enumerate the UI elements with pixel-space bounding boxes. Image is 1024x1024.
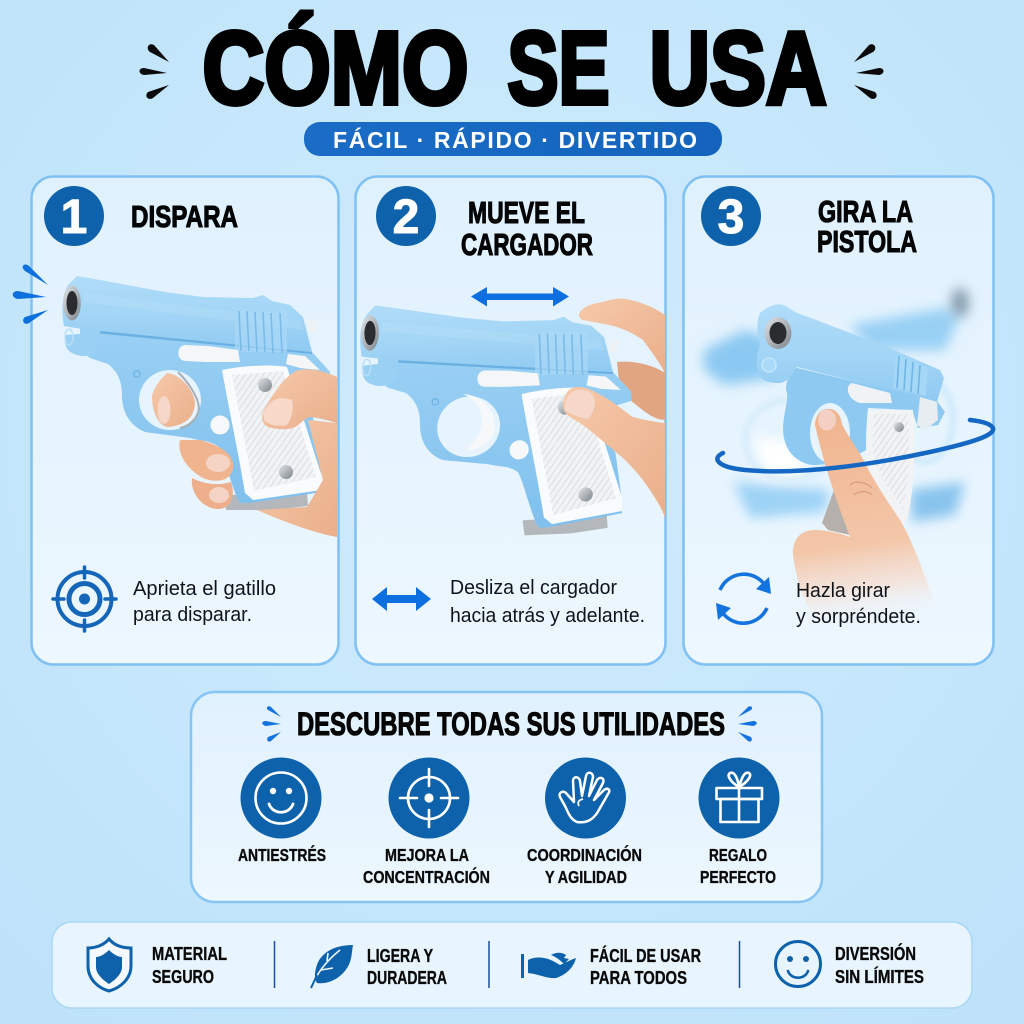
- icon: double arrow: [372, 587, 431, 611]
- motion blur: [704, 288, 969, 522]
- lower fingers: [179, 440, 233, 509]
- heading: utilidades: DESCUBRE TODAS SUS UTILIDADES: [297, 706, 725, 742]
- subtitle pill: FÁCIL · RÁPIDO · DIVERTIDO: [333, 126, 697, 153]
- heading: mueve el cargador: CARGADOR: [461, 227, 593, 262]
- label: [363, 845, 490, 887]
- heading: mueve el cargador: MUEVE EL: [468, 195, 585, 230]
- sparks left: [262, 706, 281, 742]
- text: step 3: Hazla girar: [796, 580, 890, 602]
- text: fácil de usar: FÁCIL DE USAR: [590, 945, 701, 966]
- arrow: slide direction: [471, 287, 569, 306]
- sparks right: [738, 706, 757, 742]
- white parts: [848, 383, 892, 403]
- icon: gift: [698, 758, 780, 838]
- grip: [866, 410, 915, 530]
- thumb on grip: [563, 387, 665, 517]
- text: diversión: DIVERSIÓN: [835, 943, 916, 964]
- text: material seguro: MATERIAL: [152, 944, 227, 964]
- fingers behind pistol: [617, 362, 665, 420]
- text: ligera y duradera: DURADERA: [367, 968, 447, 988]
- slide: [757, 304, 944, 402]
- text: step 1: Aprieta el gatillo: [133, 578, 276, 600]
- icon: shield: [88, 939, 131, 991]
- number badge 3: [701, 186, 761, 246]
- panel: step 3: [684, 176, 994, 664]
- text: step 3: y sorpréndete.: [796, 606, 921, 628]
- text: step 2: Desliza el cargador: [450, 577, 617, 599]
- text: step 1: [133, 578, 276, 626]
- item: concentración: [363, 758, 490, 887]
- label: COORDINACIÓN: [527, 844, 642, 865]
- label: [700, 845, 776, 887]
- arrow: orbit: [717, 420, 993, 471]
- text: step 1: para disparar.: [133, 604, 252, 626]
- label: [527, 844, 642, 887]
- icon: smile outline: [776, 942, 820, 986]
- subtitle pill: [304, 122, 722, 156]
- panel: utilidades: [191, 692, 822, 902]
- heading: gira la pistola: PISTOLA: [817, 224, 917, 259]
- title: CÓMO: [202, 10, 468, 126]
- finger and hand: [793, 409, 942, 625]
- item: regalo: [698, 758, 780, 887]
- label: CONCENTRACIÓN: [363, 866, 490, 887]
- number badge 3: 3: [718, 191, 744, 244]
- text: ligera y duradera: [367, 946, 447, 988]
- heading: mueve el cargador: [461, 195, 593, 262]
- label: ANTIESTRÉS: [238, 844, 326, 865]
- icon: rotate arrows: [716, 574, 771, 623]
- item: coordinación: [527, 758, 642, 887]
- frame: [783, 367, 945, 465]
- text: step 3: [796, 580, 921, 628]
- text: ligera y duradera: LIGERA Y: [367, 946, 433, 966]
- number badge 2: [376, 186, 436, 246]
- number badge 1: 1: [61, 191, 87, 244]
- label: Y AGILIDAD: [545, 867, 627, 887]
- panel: features bar: [52, 922, 972, 1008]
- icon: smile: [240, 758, 322, 838]
- illustration: spinning pistol: [704, 288, 969, 625]
- title sparks right: [854, 44, 884, 99]
- icon: helping hand: [521, 953, 576, 978]
- thumb: [262, 369, 337, 429]
- white trigger: [463, 394, 495, 450]
- heading: gira la pistola: [817, 194, 917, 259]
- hand behind the grip: [257, 420, 337, 537]
- number badge 1: [44, 186, 104, 246]
- title sparks left: [140, 44, 169, 99]
- text: step 2: [450, 577, 645, 627]
- item: antiestrés: [238, 758, 326, 865]
- icon: target: [53, 567, 116, 631]
- icon: hand: [545, 758, 626, 838]
- text: material seguro: [152, 944, 227, 987]
- panel: step 2: [356, 176, 666, 664]
- icon: shot sparks: [13, 265, 48, 324]
- label: PERFECTO: [700, 867, 776, 887]
- text: diversión: SIN LÍMITES: [835, 966, 924, 987]
- icon: leaf: [311, 945, 353, 988]
- title: SE: [508, 10, 610, 126]
- magazine: [822, 487, 855, 535]
- text: material seguro: SEGURO: [152, 967, 214, 987]
- text: fácil de usar: PARA TODOS: [590, 968, 687, 988]
- title: [202, 10, 826, 126]
- index finger on slide: [579, 299, 665, 373]
- label: MEJORA LA: [385, 845, 469, 865]
- heading: gira la pistola: GIRA LA: [818, 194, 913, 229]
- index finger in trigger guard: [152, 373, 195, 427]
- text: step 2: hacia atrás y adelante.: [450, 605, 645, 627]
- label: REGALO: [709, 845, 767, 865]
- text: diversión: [835, 943, 924, 987]
- title: USA: [650, 10, 826, 126]
- heading: dispara: DISPARA: [131, 199, 238, 234]
- number badge 2: 2: [393, 191, 419, 244]
- panel: step 1: [13, 176, 338, 664]
- icon: crosshair: [388, 758, 470, 838]
- illustration: pistol with hand: [62, 276, 337, 537]
- text: fácil de usar: [590, 945, 701, 988]
- illustration: pistol with hand: [359, 295, 665, 542]
